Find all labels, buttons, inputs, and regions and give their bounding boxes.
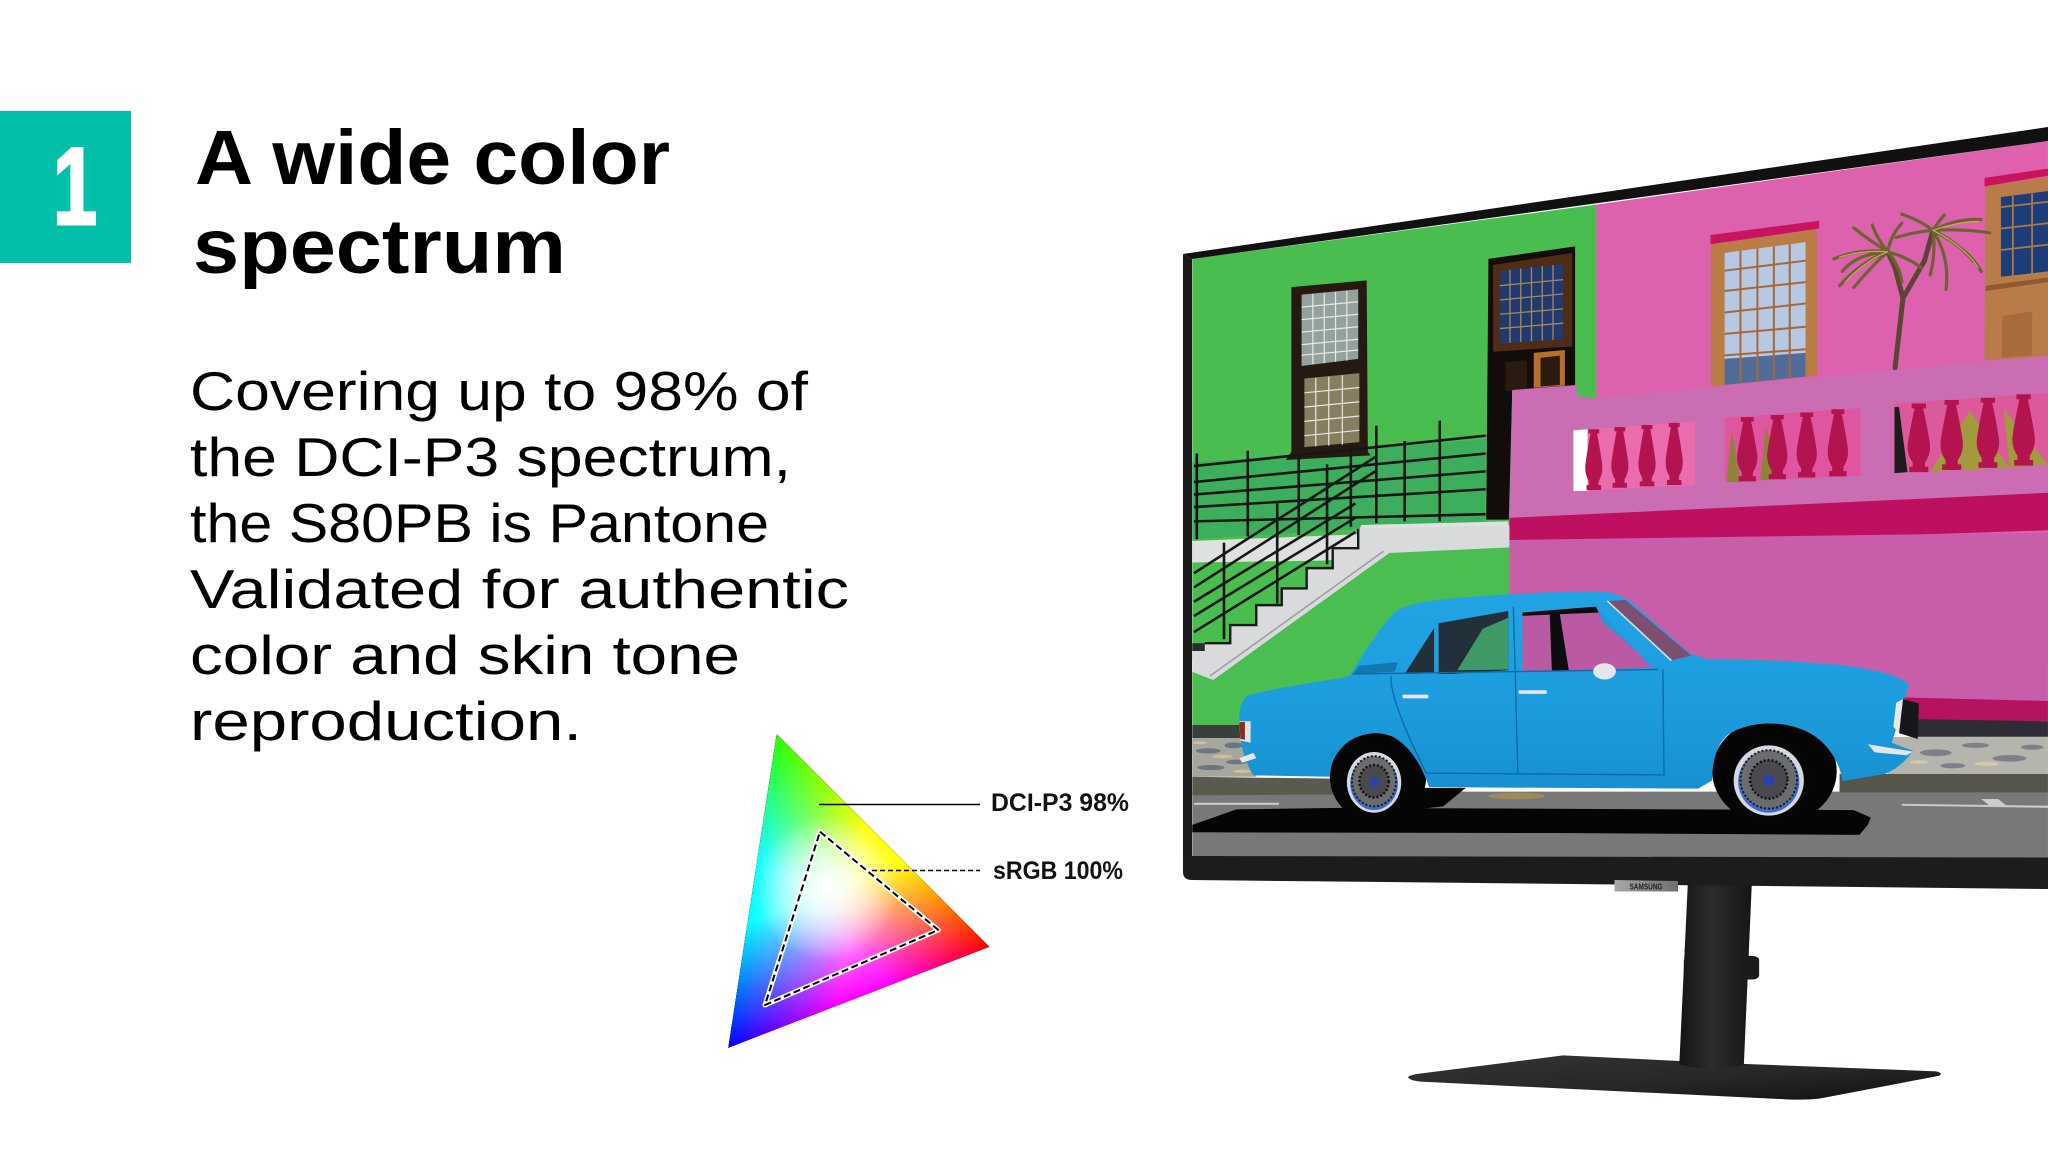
magenta strip: [1509, 493, 2048, 548]
gamut triangle: sRGB: [765, 832, 938, 1005]
body text: color and skin tone: [190, 624, 740, 686]
title: A wide color: [195, 115, 670, 201]
palm tree: [1834, 214, 1990, 368]
sidewalk left: [1192, 725, 1336, 795]
right window and door: [1985, 169, 2048, 360]
wheel arches: [1330, 718, 1837, 825]
color gamut diagram: [728, 734, 1129, 1048]
front wheel: [1726, 740, 1812, 821]
balcony openings: [1573, 393, 2048, 491]
body text: the S80PB is Pantone: [190, 492, 769, 554]
monitor top bezel: [1183, 127, 2048, 259]
car grille: [1893, 699, 1919, 739]
number badge: [0, 111, 131, 263]
oil stain: [1488, 793, 1545, 799]
body text: Validated for authentic: [190, 558, 849, 620]
car windows: [1353, 600, 1691, 675]
balusters: [1585, 394, 2035, 490]
gamut triangle: DCI-P3: [728, 734, 989, 1048]
title: spectrum: [193, 204, 566, 290]
green wall: [1192, 205, 1596, 660]
stand neck: [1679, 884, 1752, 1069]
body text: the DCI-P3 spectrum,: [190, 426, 791, 488]
tail light: [1239, 721, 1251, 743]
sidewalk right: [1840, 719, 2048, 792]
rear wheel: [1340, 748, 1408, 816]
body text: [190, 360, 849, 752]
wall base strip: [1896, 697, 2048, 721]
samsung badge: SAMSUNG: [1630, 882, 1662, 892]
monitor left bezel: [1183, 254, 1192, 858]
car trim: [1239, 663, 1913, 763]
lower green wall: [1192, 547, 1509, 725]
stand base: [1408, 1055, 1941, 1100]
body text: reproduction.: [190, 690, 582, 752]
monitor: [1183, 127, 2048, 1100]
lower pink wall: [1509, 533, 2048, 718]
number badge: 1: [53, 125, 97, 248]
stand knob: [1684, 956, 1759, 980]
stair shadows: [1205, 529, 1358, 643]
stairs: [1192, 525, 1509, 680]
balcony wall: [1509, 356, 2048, 518]
car shadow: [1192, 808, 1871, 835]
road: [1192, 792, 2048, 858]
label: DCI-P3: DCI-P3 98%: [991, 789, 1129, 817]
car lines: [1353, 607, 1664, 775]
leader line: sRGB: [872, 870, 980, 872]
car body: [1239, 592, 1913, 789]
samsung badge: [1614, 880, 1678, 892]
door: [1486, 246, 1575, 520]
left window: [1286, 280, 1371, 460]
pink wall: [1509, 141, 2048, 660]
railing: [1194, 421, 1486, 639]
pink wall window: [1710, 221, 1819, 386]
leader line: DCI-P3: [819, 804, 980, 806]
monitor screen image: [1192, 141, 2048, 858]
stair slab: [1192, 521, 1508, 562]
road markings: [1194, 799, 2048, 808]
label: sRGB: sRGB 100%: [993, 857, 1123, 885]
title: [193, 115, 670, 290]
monitor stand: [1408, 884, 1941, 1100]
monitor chin: [1183, 856, 2048, 889]
body text: Covering up to 98% of: [190, 360, 809, 422]
